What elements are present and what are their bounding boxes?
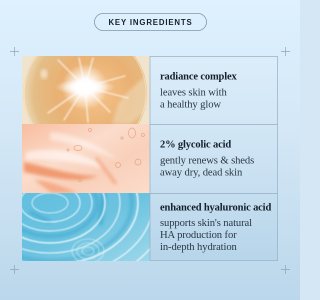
text: hyaluronic acid: supports skin's natural: [160, 218, 252, 229]
text: hyaluronic acid: HA production for: [160, 230, 237, 241]
icon: plus bottom left: [10, 265, 19, 274]
text: glycolic acid: gently renews & sheds: [160, 156, 254, 166]
text: glycolic acid: 2% glycolic acid: [160, 140, 231, 150]
text: hyaluronic acid: [160, 202, 271, 253]
panel: ingredient descriptions: [150, 56, 278, 260]
text: radiance complex: [160, 72, 238, 110]
text: glycolic acid: [160, 140, 254, 178]
photo: hyaluronic water ripples: [22, 193, 150, 261]
icon: plus top right: [281, 47, 290, 56]
photo: radiance orb: [22, 56, 150, 124]
title pill: [94, 14, 206, 30]
text: hyaluronic acid: in-depth hydration: [160, 242, 238, 253]
title pill: KEY INGREDIENTS: [108, 18, 193, 27]
icon: plus bottom right: [281, 265, 290, 274]
icon: plus top left: [10, 47, 19, 56]
photo: glycolic gel: [22, 124, 150, 193]
text: glycolic acid: away dry, dead skin: [160, 168, 243, 178]
text: radiance complex: a healthy glow: [160, 100, 221, 110]
text: hyaluronic acid: enhanced hyaluronic acid: [160, 202, 271, 214]
text: radiance complex: leaves skin with: [160, 88, 227, 98]
text: radiance complex: radiance complex: [160, 72, 238, 82]
